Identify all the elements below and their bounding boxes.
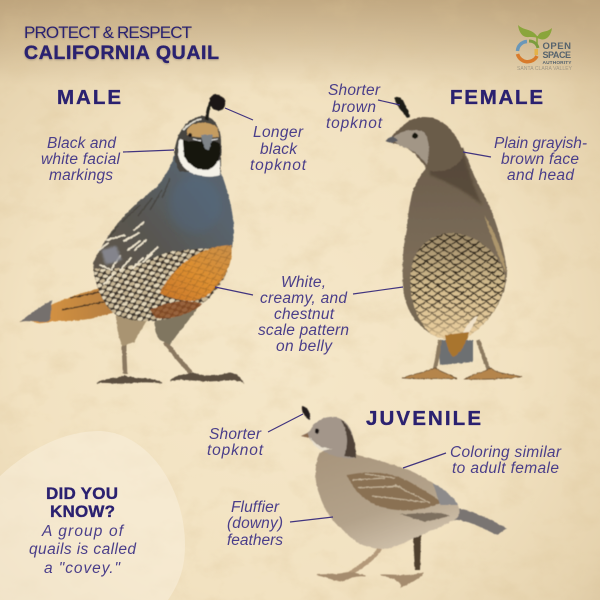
male tail xyxy=(20,284,125,323)
label: fluffier downy feathers: Fluffier xyxy=(231,499,280,516)
label: plain grayish-brown face and head: and head xyxy=(507,167,575,184)
label: black and white facial markings: markings xyxy=(49,167,113,184)
label: shorter topknot xyxy=(207,426,264,459)
male head xyxy=(175,94,225,177)
label: fluffier downy feathers xyxy=(227,499,283,549)
label: longer black topknot: topknot xyxy=(250,157,307,174)
label: fluffier downy feathers: (downy) xyxy=(227,515,283,532)
label: scale pattern on belly: on belly xyxy=(276,338,333,355)
female quail xyxy=(385,97,522,379)
title: CALIFORNIA QUAIL xyxy=(24,42,219,64)
female wing edge xyxy=(484,215,506,272)
label: shorter brown topknot: Shorter xyxy=(328,82,381,99)
juvenile head xyxy=(301,406,356,459)
label: longer black topknot: black xyxy=(260,141,298,158)
juvenile tail xyxy=(445,508,507,535)
label: scale pattern on belly: White, xyxy=(281,274,326,291)
female legs and tail xyxy=(402,340,522,379)
male body xyxy=(93,140,234,321)
label: black and white facial markings: white facial xyxy=(41,151,121,168)
label: longer black topknot xyxy=(250,124,307,174)
juvenile wing xyxy=(347,472,458,522)
label: plain grayish-brown face and head: brown face xyxy=(501,151,579,168)
label: scale pattern on belly: chestnut xyxy=(274,306,335,323)
male quail xyxy=(20,94,243,383)
male scale pattern belly xyxy=(94,248,230,321)
label: shorter brown topknot xyxy=(326,82,383,132)
female neck shading xyxy=(430,148,482,205)
callout: did you know: DID YOU xyxy=(46,484,118,503)
label: black and white facial markings: Black and xyxy=(47,135,117,152)
label: fluffier downy feathers: feathers xyxy=(227,532,283,549)
male white flank streaks xyxy=(98,222,158,284)
label: coloring similar to adult female: Coloring similar xyxy=(450,444,562,461)
female head xyxy=(385,97,464,171)
leader lines xyxy=(123,100,491,522)
title: PROTECT & RESPECT xyxy=(24,23,192,42)
callout: did you know xyxy=(29,484,137,577)
heading: female: FEMALE xyxy=(450,86,543,109)
label: scale pattern on belly: scale pattern xyxy=(258,322,349,339)
logo: Open Space Authority: AUTHORITY xyxy=(542,60,572,66)
logo: Open Space Authority: OPEN xyxy=(542,41,571,52)
label: black and white facial markings xyxy=(41,135,121,184)
label: shorter topknot: Shorter xyxy=(209,426,262,443)
callout: did you know: A group of xyxy=(41,523,125,540)
did you know blob background xyxy=(0,431,185,600)
label: shorter topknot: topknot xyxy=(207,442,264,459)
logo: Open Space Authority xyxy=(517,25,573,72)
label: scale pattern on belly: creamy, and xyxy=(260,290,348,307)
logo: Open Space Authority: SANTA CLARA VALLEY xyxy=(517,66,573,72)
juvenile legs xyxy=(317,535,423,587)
juvenile quail xyxy=(301,406,507,587)
label: coloring similar to adult female xyxy=(450,444,562,477)
label: shorter brown topknot: brown xyxy=(332,99,376,116)
label: plain grayish-brown face and head xyxy=(494,135,587,184)
label: scale pattern on belly xyxy=(258,274,349,355)
callout: did you know: quails is called xyxy=(29,541,137,558)
juvenile body xyxy=(316,445,459,549)
label: plain grayish-brown face and head: Plain grayish- xyxy=(494,135,587,152)
female scale belly xyxy=(410,233,505,357)
callout: did you know: a "covey." xyxy=(44,560,121,577)
female body xyxy=(403,148,507,340)
title xyxy=(24,23,219,64)
male orange flank patch xyxy=(150,245,232,318)
callout: did you know: KNOW? xyxy=(50,502,115,521)
label: longer black topknot: Longer xyxy=(253,124,304,141)
label: coloring similar to adult female: to adult female xyxy=(452,460,559,477)
male legs xyxy=(97,304,243,383)
heading: juvenile: JUVENILE xyxy=(366,407,481,430)
male back streaks xyxy=(108,178,170,240)
male chest feather shading xyxy=(169,177,221,233)
label: shorter brown topknot: topknot xyxy=(326,115,383,132)
heading: male: MALE xyxy=(57,86,121,109)
logo: Open Space Authority: SPACE xyxy=(542,50,571,60)
